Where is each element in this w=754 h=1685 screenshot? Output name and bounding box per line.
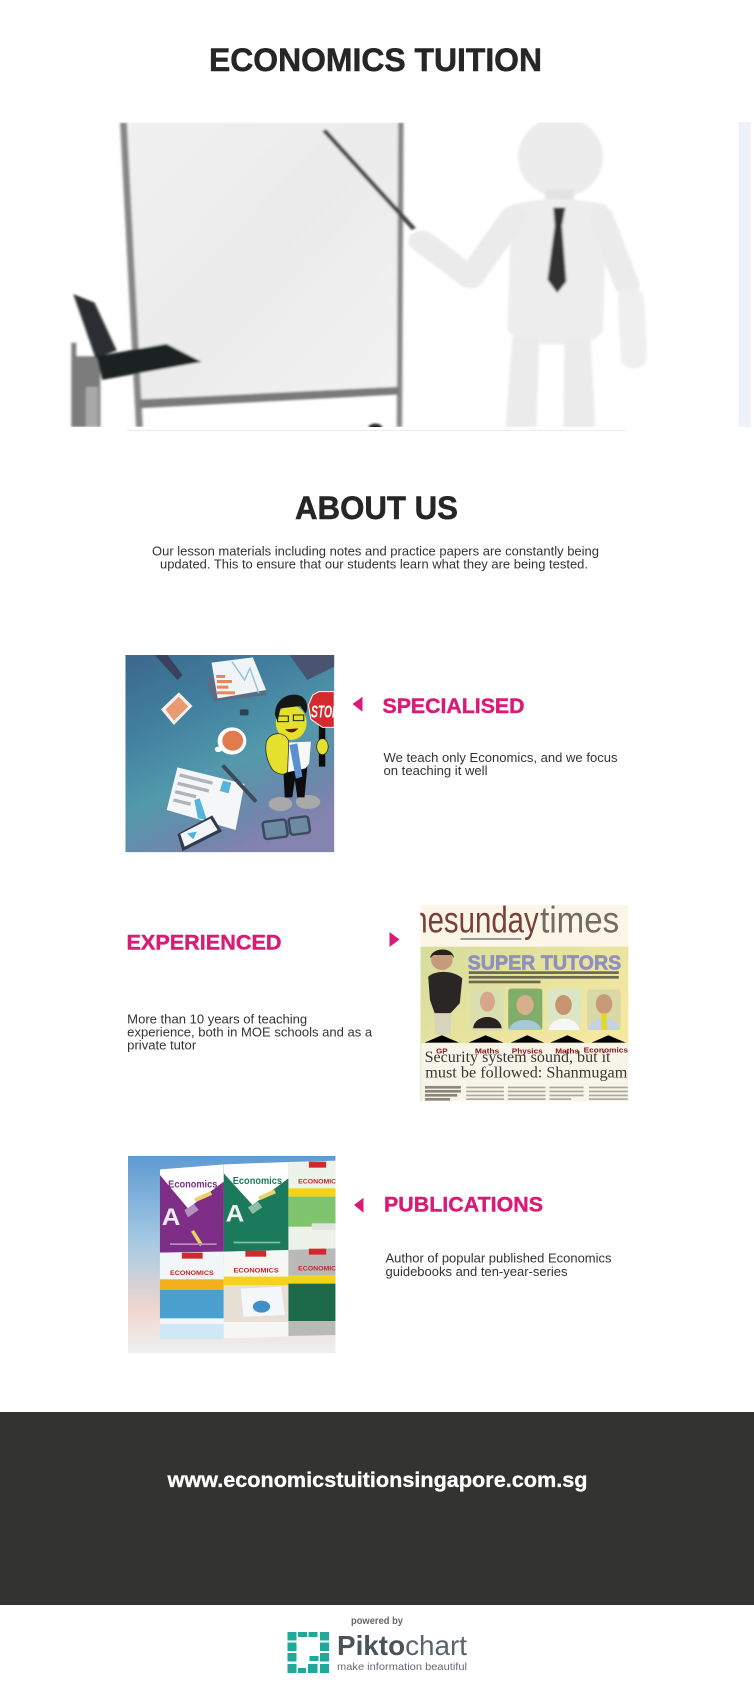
cartoon tutor: STOP xyxy=(311,702,340,721)
image: economics guidebooks xyxy=(128,1156,336,1353)
about text: updated. This to ensure that our students learn what they are being tested. xyxy=(160,556,588,572)
text: experienced xyxy=(127,1012,373,1053)
text: publications xyxy=(386,1251,612,1279)
heading: about us: ABOUT US xyxy=(295,490,458,526)
whiteboard xyxy=(123,123,401,431)
text: publications: guidebooks and ten-year-series xyxy=(386,1264,568,1279)
hero image: presenter at whiteboard xyxy=(71,117,634,431)
piktochart logo xyxy=(288,1615,467,1673)
about text xyxy=(152,544,599,572)
book 3 xyxy=(288,1161,336,1250)
panel: specialised xyxy=(125,655,618,852)
image: newspaper clipping: SUPER TUTORS xyxy=(468,951,621,974)
presenter figure xyxy=(422,117,634,427)
image: newspaper clipping: Maths xyxy=(475,1047,500,1055)
laptop on stand xyxy=(71,294,202,427)
book 4 xyxy=(160,1252,224,1339)
heading: specialised: SPECIALISED xyxy=(382,695,524,718)
panel: publications xyxy=(128,1156,612,1353)
arrow: left xyxy=(352,697,362,712)
wordmark: Piktochart xyxy=(337,1630,467,1661)
side strip xyxy=(738,122,750,427)
arrow: left xyxy=(354,1198,364,1213)
pointer xyxy=(324,130,414,229)
icon: piktochart mark xyxy=(288,1632,329,1673)
image: newspaper clipping: Security system sound, but it xyxy=(425,1049,611,1066)
book 2: Economics xyxy=(233,1176,282,1187)
image: newspaper clipping xyxy=(403,900,629,1102)
text: experienced: More than 10 years of teaching xyxy=(127,1012,307,1027)
panel: experienced xyxy=(126,900,629,1102)
about text: Our lesson materials including notes and practice papers are constantly being xyxy=(152,544,599,558)
image: newspaper clipping: Economics xyxy=(584,1046,629,1055)
heading: experienced: EXPERIENCED xyxy=(126,931,282,954)
book 1: Economics xyxy=(168,1180,218,1190)
image: newspaper clipping: thesunday xyxy=(403,900,539,941)
book 6: ECONOMIC xyxy=(298,1266,336,1273)
book 2: A xyxy=(226,1200,244,1227)
image: newspaper clipping: Maths xyxy=(555,1047,580,1055)
text: specialised xyxy=(384,750,618,778)
heading: publications: PUBLICATIONS xyxy=(384,1194,543,1217)
footer band xyxy=(0,1412,754,1605)
book 2 xyxy=(224,1162,288,1252)
text: specialised: We teach only Economics, and we focus xyxy=(384,750,618,765)
footer url: www.economicstuitionsingapore.com.sg xyxy=(166,1469,588,1492)
book 5: ECONOMICS xyxy=(234,1268,279,1275)
image: newspaper clipping: Physics xyxy=(512,1047,543,1055)
book 4: ECONOMICS xyxy=(170,1270,214,1277)
text: experienced: experience, both in MOE schools and as a xyxy=(127,1025,373,1040)
powered by: powered by xyxy=(351,1615,403,1627)
book 6 xyxy=(288,1248,336,1336)
image: newspaper clipping: times xyxy=(540,900,619,941)
tagline: make information beautiful xyxy=(337,1661,467,1673)
book 3: ECONOMIC xyxy=(298,1179,336,1185)
title: ECONOMICS TUITION xyxy=(209,42,542,78)
text: specialised: on teaching it well xyxy=(384,763,488,778)
book 1: A xyxy=(162,1204,180,1231)
cartoon tutor xyxy=(266,692,340,811)
arrow: right xyxy=(390,932,400,947)
text: experienced: private tutor xyxy=(127,1038,197,1053)
book 5 xyxy=(224,1250,288,1338)
image: newspaper clipping: must be followed: Shanmugam xyxy=(425,1065,628,1081)
book 1 xyxy=(160,1164,224,1253)
text: publications: Author of popular published Economics xyxy=(386,1251,612,1266)
illustration: cartoon tutor on desk xyxy=(125,655,340,852)
image: newspaper clipping: GP xyxy=(436,1047,448,1055)
